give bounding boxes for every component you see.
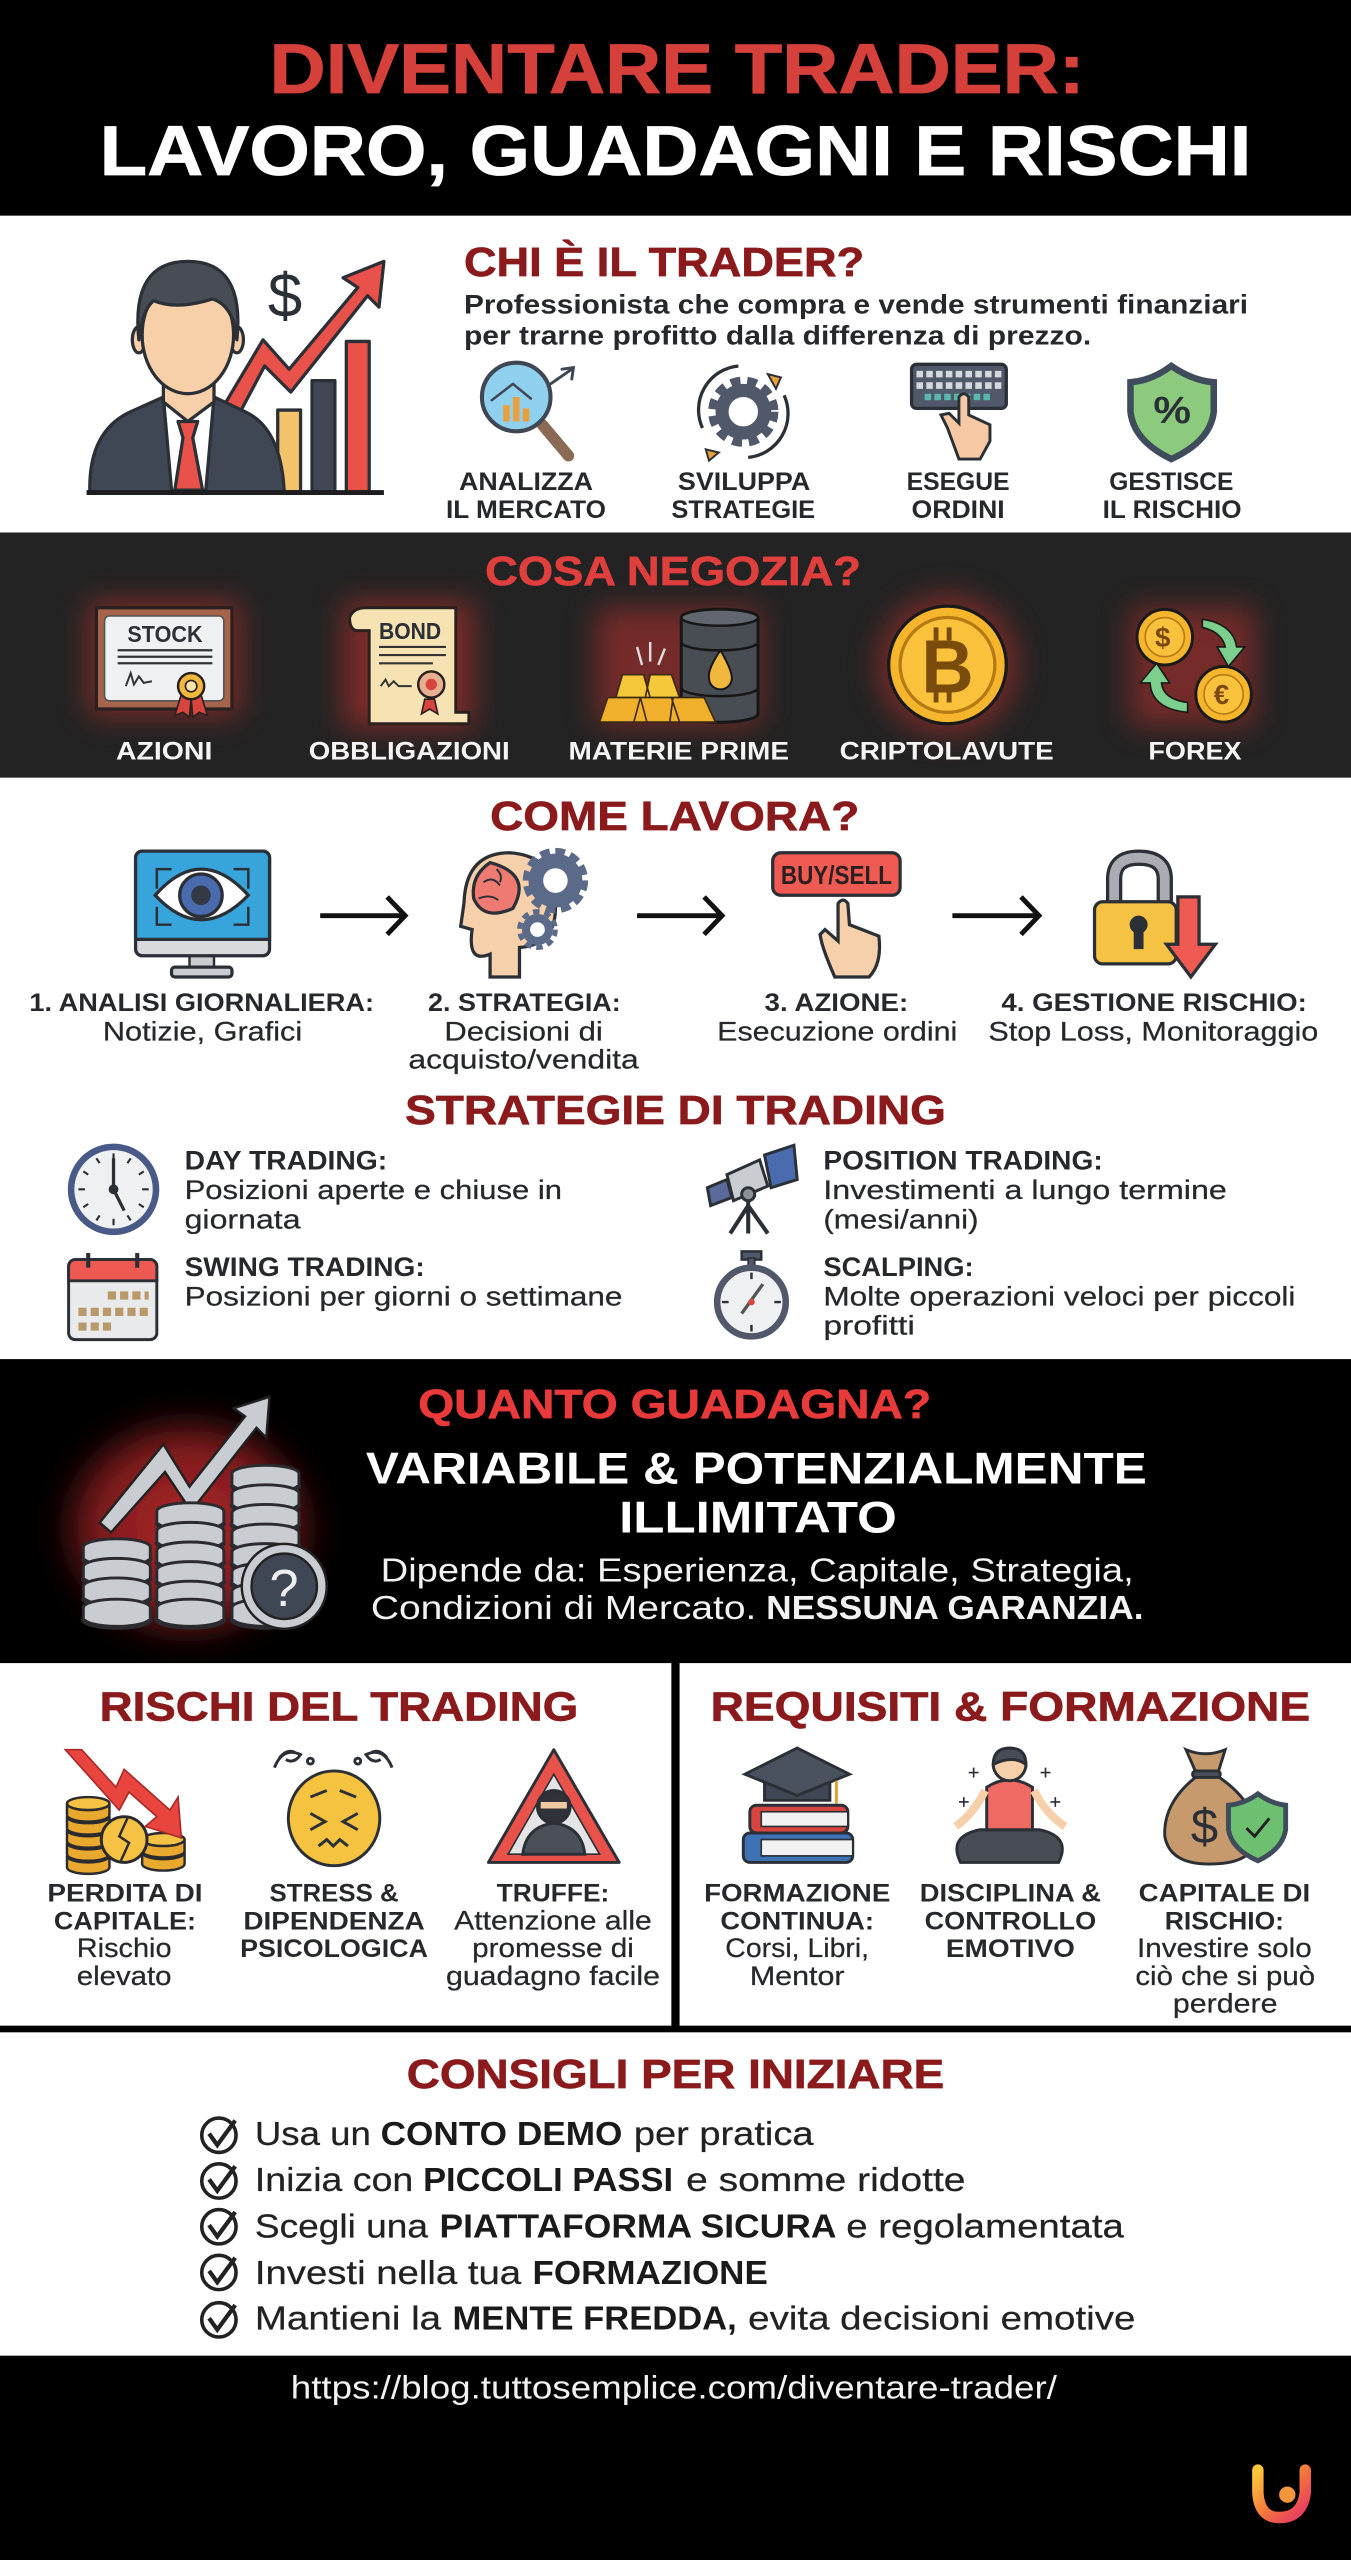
risk text xyxy=(240,1880,428,1963)
icon: stopwatch xyxy=(717,1251,786,1336)
description: Professionista che compra e vende strumenti finanziari xyxy=(464,290,1248,320)
icon: padlock with down arrow xyxy=(1095,858,1215,977)
step 3 text: Esecuzione ordini xyxy=(717,1017,957,1047)
strategy: position trading: Investimenti a lungo termine xyxy=(823,1175,1227,1205)
risk text xyxy=(446,1880,660,1991)
step 1 text: Notizie, Grafici xyxy=(103,1017,302,1047)
icon: trader with rising chart xyxy=(87,261,384,495)
strategy: scalping: profitti xyxy=(823,1311,915,1341)
tip 3: e regolamentata xyxy=(846,2208,1124,2245)
icon: stock certificate: STOCK xyxy=(127,621,203,647)
step 3 text xyxy=(717,989,957,1047)
logo xyxy=(1258,2470,1305,2518)
icon: telescope xyxy=(707,1145,797,1233)
icon: gear with arrows xyxy=(699,366,788,461)
icon: falling arrow over coins xyxy=(65,1750,185,1874)
step 1 text xyxy=(29,989,374,1047)
risk text: promesse di xyxy=(472,1933,634,1963)
strategy: position trading: POSITION TRADING: xyxy=(823,1146,1103,1176)
strategy: day trading: Posizioni aperte e chiuse in xyxy=(185,1175,562,1205)
tip 3: PIATTAFORMA SICURA xyxy=(439,2208,836,2245)
description: NESSUNA GARANZIA. xyxy=(766,1590,1144,1627)
label: SVILUPPA xyxy=(678,468,810,496)
panel: consigli per iniziare xyxy=(0,2032,1351,2356)
icon: buy/sell button with hand: BUY/SELL xyxy=(781,860,892,890)
icon: coin stacks with arrow and question mark: ? xyxy=(270,1560,299,1618)
requirement text: perdere xyxy=(1173,1989,1277,2019)
tip 1: per pratica xyxy=(634,2116,814,2153)
label: ORDINI xyxy=(912,496,1005,524)
icon: bond scroll xyxy=(343,601,474,729)
icon: graduation cap and books xyxy=(743,1748,853,1862)
arrow xyxy=(952,897,1039,934)
tip 3: Scegli una xyxy=(255,2208,428,2245)
tip 2: Inizia con xyxy=(255,2162,413,2199)
icon: stock certificate xyxy=(88,601,240,717)
label: MATERIE PRIME xyxy=(568,738,789,766)
step 4 text xyxy=(988,989,1318,1047)
icon: gold bars and oil barrel xyxy=(596,608,760,725)
tip 4: Investi nella tua xyxy=(255,2255,522,2292)
strategy: scalping xyxy=(823,1252,1295,1341)
vertical divider xyxy=(671,1663,680,2026)
risk text: CAPITALE: xyxy=(54,1907,196,1935)
risk text: TRUFFE: xyxy=(497,1880,609,1908)
description: Condizioni di Mercato. xyxy=(371,1590,756,1627)
icon: scam warning triangle xyxy=(488,1750,619,1862)
icon: clock xyxy=(71,1147,156,1232)
icon: bitcoin coin: B xyxy=(921,625,974,709)
step 3 text: 3. AZIONE: xyxy=(765,989,908,1017)
label xyxy=(446,468,606,524)
description xyxy=(371,1552,1144,1627)
requirement text: CONTROLLO xyxy=(925,1907,1096,1935)
step 2 text: 2. STRATEGIA: xyxy=(428,989,621,1017)
requirement text: Corsi, Libri, xyxy=(725,1933,869,1963)
icon: keyboard and hand xyxy=(912,364,1006,459)
headline: ILLIMITATO xyxy=(619,1493,897,1542)
panel: footer xyxy=(0,2356,1351,2560)
label: AZIONI xyxy=(116,738,212,766)
icon: coin stacks with arrow and question mark xyxy=(49,1397,327,1650)
requirement text: Investire solo xyxy=(1137,1933,1312,1963)
title line 1: DIVENTARE TRADER: xyxy=(270,29,1085,108)
heading: COSA NEGOZIA? xyxy=(485,548,861,594)
tip 5: MENTE FREDDA, xyxy=(453,2301,737,2338)
requirement text xyxy=(1135,1880,1315,2019)
heading: REQUISITI & FORMAZIONE xyxy=(711,1683,1310,1729)
label: FOREX xyxy=(1148,738,1242,766)
label: STRATEGIE xyxy=(671,496,815,524)
arrow xyxy=(637,897,722,934)
icon: money bag and shield xyxy=(1165,1750,1286,1864)
panel: requisiti e formazione xyxy=(680,1663,1351,2026)
tip 2: e somme ridotte xyxy=(686,2162,965,2199)
panel: title header xyxy=(0,0,1351,216)
tip 2 xyxy=(202,2162,965,2199)
requirement text: CAPITALE DI xyxy=(1139,1880,1310,1908)
heading: CHI È IL TRADER? xyxy=(464,239,864,285)
step 2 text xyxy=(408,989,639,1074)
icon: forex coins: € xyxy=(1214,679,1229,710)
strategy: scalping: Molte operazioni veloci per piccoli xyxy=(823,1281,1295,1311)
label: ANALIZZA xyxy=(459,468,593,496)
risk text xyxy=(47,1880,203,1991)
step 4 text: 4. GESTIONE RISCHIO: xyxy=(1001,989,1307,1017)
risk text: STRESS & xyxy=(270,1880,399,1908)
risk text: elevato xyxy=(77,1961,172,1991)
icon: calendar xyxy=(69,1253,157,1340)
requirement text: Mentor xyxy=(750,1961,845,1991)
risk text: DIPENDENZA xyxy=(243,1907,425,1935)
icon: monitor with eye xyxy=(136,851,270,977)
label: OBBLIGAZIONI xyxy=(309,738,510,766)
description: Dipende da: Esperienza, Capitale, Strategia, xyxy=(381,1552,1134,1589)
icon: money bag and shield: $ xyxy=(1191,1800,1218,1854)
tip 4: FORMAZIONE xyxy=(533,2255,768,2292)
label: CRIPTOLAVUTE xyxy=(840,738,1054,766)
tip 5 xyxy=(202,2301,1135,2338)
strategy: position trading xyxy=(823,1146,1227,1235)
description xyxy=(464,290,1248,351)
headline: VARIABILE & POTENZIALMENTE xyxy=(366,1444,1147,1493)
heading: CONSIGLI PER INIZIARE xyxy=(407,2051,944,2097)
panel: cosa negozia xyxy=(0,533,1351,778)
strategy: swing trading xyxy=(185,1252,622,1311)
label: GESTISCE xyxy=(1109,468,1233,496)
strategy: swing trading: Posizioni per giorni o settimane xyxy=(185,1281,622,1311)
step 2 text: acquisto/vendita xyxy=(408,1044,639,1074)
requirement text: RISCHIO: xyxy=(1165,1907,1284,1935)
heading: STRATEGIE DI TRADING xyxy=(405,1087,946,1133)
panel: chi è il trader xyxy=(0,216,1351,533)
tip 3 xyxy=(202,2208,1124,2245)
risk text: PERDITA DI xyxy=(47,1880,203,1908)
title line 2: LAVORO, GUADAGNI E RISCHI xyxy=(100,111,1251,190)
dollar sign: $ xyxy=(268,262,302,331)
step 1 text: 1. ANALISI GIORNALIERA: xyxy=(29,989,374,1017)
strategy: scalping: SCALPING: xyxy=(823,1252,974,1282)
strategy: swing trading: SWING TRADING: xyxy=(185,1252,425,1282)
tip 5: Mantieni la xyxy=(255,2301,442,2338)
label xyxy=(1103,468,1242,524)
headline xyxy=(366,1444,1147,1542)
icon: forex coins xyxy=(1130,608,1255,725)
heading: QUANTO GUADAGNA? xyxy=(418,1381,931,1427)
label: ESEGUE xyxy=(907,468,1010,496)
requirement text xyxy=(920,1880,1101,1963)
tip 5: evita decisioni emotive xyxy=(748,2301,1135,2338)
icon: head with gears xyxy=(461,851,585,977)
tip 2: PICCOLI PASSI xyxy=(423,2162,673,2199)
step 2 text: Decisioni di xyxy=(444,1017,603,1047)
strategy: position trading: (mesi/anni) xyxy=(823,1205,979,1235)
panel: come lavora e strategie xyxy=(0,778,1351,1359)
requirement text: EMOTIVO xyxy=(946,1935,1075,1963)
panel: rischi del trading xyxy=(0,1663,671,2026)
tip 4 xyxy=(202,2255,768,2292)
requirement text: DISCIPLINA & xyxy=(920,1880,1101,1908)
label: IL RISCHIO xyxy=(1103,496,1242,524)
requirement text: ciò che si può xyxy=(1135,1961,1315,1991)
requirement text xyxy=(704,1880,890,1991)
requirement text: FORMAZIONE xyxy=(704,1880,890,1908)
heading: COME LAVORA? xyxy=(490,793,859,839)
heading: RISCHI DEL TRADING xyxy=(100,1683,578,1729)
arrow xyxy=(320,897,405,934)
icon: buy/sell button with hand xyxy=(773,853,900,977)
icon: forex coins: $ xyxy=(1155,622,1171,653)
panel: quanto guadagna xyxy=(0,1359,1351,1663)
label xyxy=(671,468,815,524)
strategy: day trading: DAY TRADING: xyxy=(185,1146,387,1176)
description: per trarne profitto dalla differenza di prezzo. xyxy=(464,321,1091,351)
strategy: day trading xyxy=(185,1146,562,1235)
icon: bond scroll: BOND xyxy=(379,618,441,644)
icon: magnifier xyxy=(482,363,573,456)
icon: shield with percent: % xyxy=(1153,389,1191,431)
icon: stressed face xyxy=(274,1751,392,1866)
tip 1: Usa un xyxy=(255,2116,371,2153)
icon: meditating person xyxy=(956,1748,1065,1862)
strategy: day trading: giornata xyxy=(185,1205,301,1235)
tip 1: CONTO DEMO xyxy=(381,2116,622,2153)
horizontal divider xyxy=(0,2026,1351,2032)
risk text: PSICOLOGICA xyxy=(240,1935,428,1963)
step 4 text: Stop Loss, Monitoraggio xyxy=(988,1017,1318,1047)
label: IL MERCATO xyxy=(446,496,606,524)
icon: bitcoin coin xyxy=(877,595,1018,735)
risk text: guadagno facile xyxy=(446,1961,660,1991)
label xyxy=(907,468,1010,524)
source url: https://blog.tuttosemplice.com/diventare-trader/ xyxy=(291,2368,1058,2405)
risk text: Rischio xyxy=(77,1933,172,1963)
requirement text: CONTINUA: xyxy=(720,1907,874,1935)
icon: shield with percent xyxy=(1130,366,1214,459)
tip 1 xyxy=(202,2116,814,2153)
risk text: Attenzione alle xyxy=(454,1905,652,1935)
